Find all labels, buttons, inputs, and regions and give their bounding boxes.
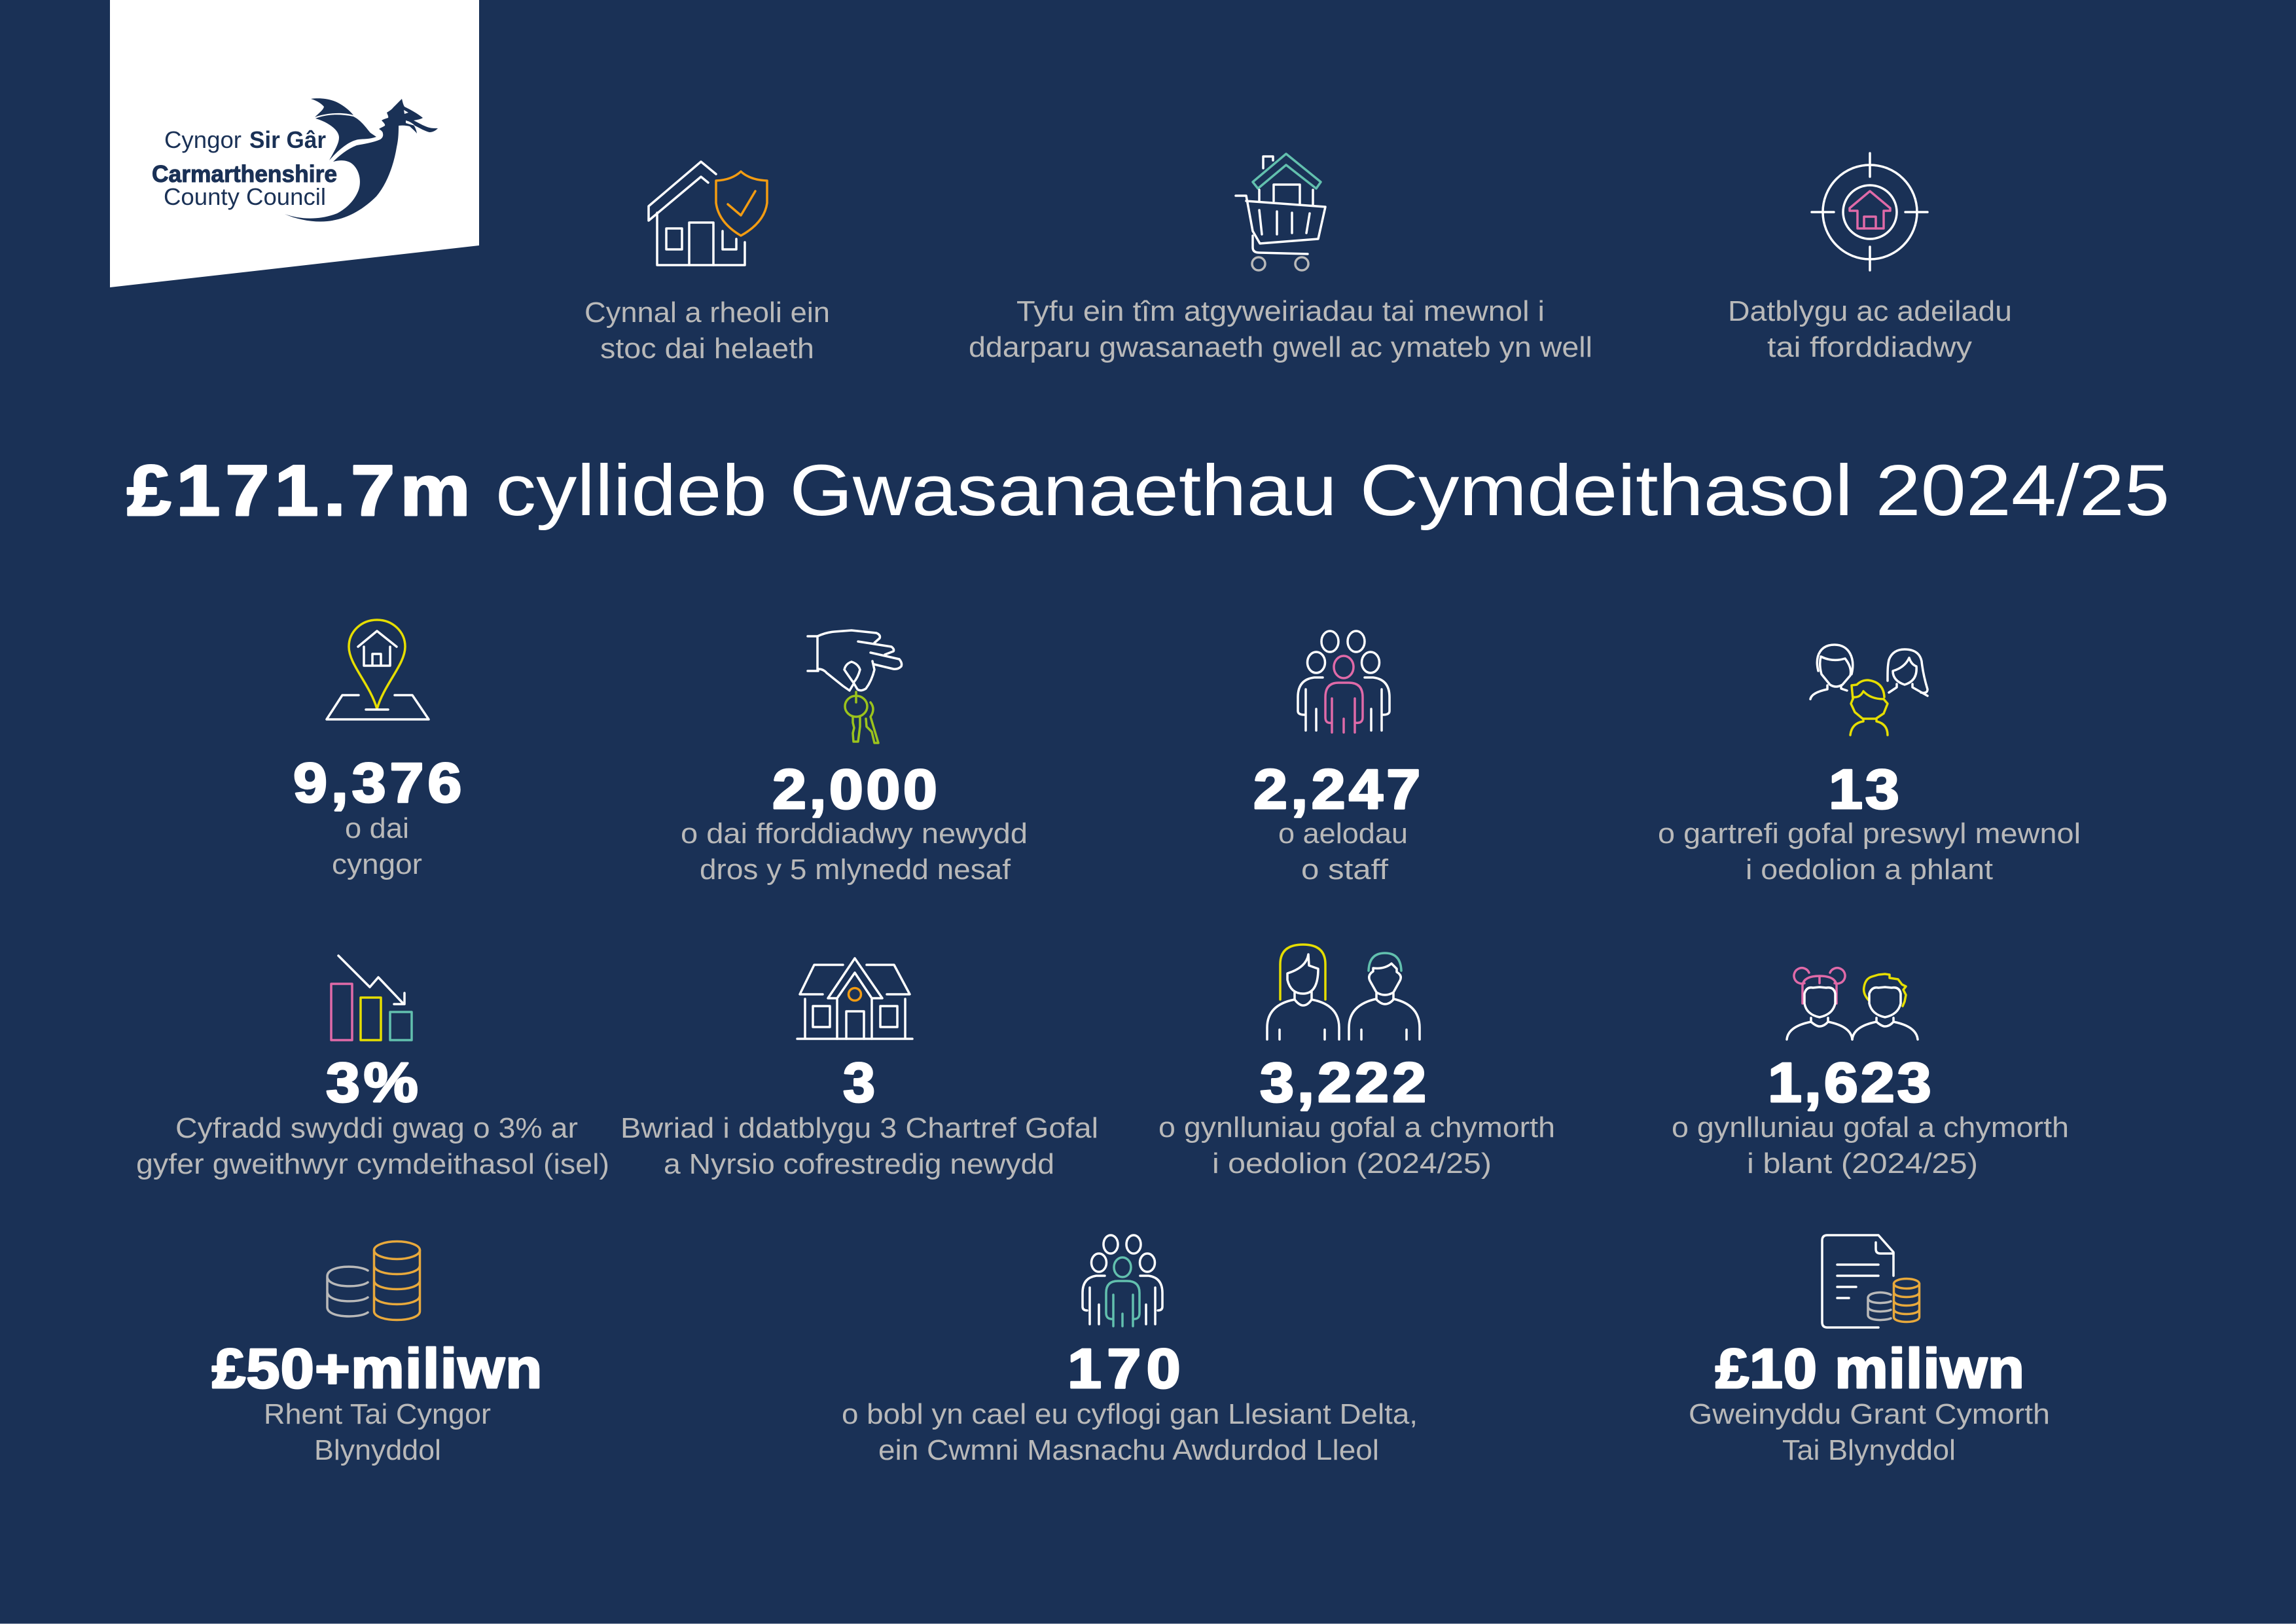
text: staff: [1278, 818, 1408, 886]
panel: vacancy rate: [136, 956, 609, 1180]
text: repairs team: Tyfu ein tîm atgyweiriadau tai mewnol i: [1016, 295, 1545, 327]
icon: two adults: [1267, 945, 1420, 1039]
logo wordmark: [152, 126, 337, 210]
panel: manage housing stock: [584, 162, 830, 365]
title: £171.7m: [127, 450, 471, 531]
text: council houses: cyngor: [332, 848, 422, 880]
text: Llesiant Delta employees: ein Cwmni Masnachu Awdurdod Lleol: [878, 1434, 1379, 1466]
text: council houses: o dai: [345, 812, 409, 844]
text: vacancy rate: [136, 1112, 609, 1180]
title: cyllideb Gwasanaethau Cymdeithasol 2024/25: [495, 450, 2170, 531]
text: residential care homes: o gartrefi gofal preswyl mewnol: [1658, 818, 2081, 850]
text: staff: o staff: [1301, 854, 1389, 886]
icon: two children: [1787, 968, 1918, 1039]
text: council housing rent: Rhent Tai Cyngor: [264, 1398, 491, 1430]
logo wordmark: Sir Gâr: [249, 126, 326, 153]
logo wordmark: Cyngor: [164, 126, 242, 153]
icon: coin stacks: [327, 1241, 420, 1320]
text: affordable homes: o dai fforddiadwy newydd: [681, 818, 1028, 850]
panel: affordable homes: [681, 630, 1028, 886]
panel: council housing rent: [212, 1241, 542, 1466]
text: adult care plans: i oedolion (2024/25): [1212, 1147, 1492, 1180]
stat: 2,247: 2,247: [1253, 758, 1420, 820]
text: housing support grant: Gweinyddu Grant Cymorth: [1689, 1398, 2050, 1430]
text: affordable housing: Datblygu ac adeiladu: [1728, 295, 2012, 327]
panel: affordable housing: [1728, 153, 2012, 363]
text: children's care plans: o gynlluniau gofal a chymorth: [1672, 1111, 2069, 1144]
text: adult care plans: [1158, 1111, 1555, 1180]
text: council housing rent: Blynyddol: [314, 1434, 441, 1466]
text: affordable homes: [681, 818, 1028, 886]
icon: house in shopping trolley: [1236, 154, 1325, 270]
stat: 3,222: 3,222: [1260, 1051, 1426, 1113]
icon: hand with keys: [808, 630, 902, 743]
text: council houses: [332, 812, 422, 880]
text: staff: o aelodau: [1278, 818, 1408, 850]
text: residential care homes: i oedolion a phlant: [1746, 854, 1993, 886]
stat: 3%: 3%: [326, 1051, 418, 1113]
text: nursing homes: Bwriad i ddatblygu 3 Chartref Gofal: [620, 1112, 1098, 1144]
stat: 2,000: 2,000: [772, 758, 937, 820]
text: affordable homes: dros y 5 mlynedd nesaf: [700, 854, 1011, 886]
icon: falling bar chart: [331, 956, 412, 1040]
stat: 13: 13: [1829, 758, 1899, 820]
panel: council logo: [110, 0, 479, 287]
text: housing support grant: [1689, 1398, 2050, 1466]
panel: repairs team: [969, 154, 1592, 363]
panel: residential care homes: [1658, 645, 2081, 886]
stat: 170: 170: [1067, 1337, 1181, 1399]
icon: family: [1810, 645, 1928, 735]
text: children's care plans: i blant (2024/25): [1747, 1147, 1978, 1180]
text: residential care homes: [1658, 818, 2081, 886]
icon: map pin with house: [327, 620, 429, 719]
panel: adult care plans: [1158, 945, 1555, 1180]
icon: group of people, pink centre: [1298, 631, 1390, 732]
text: manage housing stock: Cynnal a rheoli ein: [584, 297, 830, 329]
text: affordable housing: tai fforddiadwy: [1767, 331, 1972, 363]
icon: dragon: [285, 98, 438, 222]
stat: £10 miliwn: £10 miliwn: [1715, 1337, 2024, 1399]
icon: document with coins: [1822, 1235, 1919, 1327]
icon: target with house: [1812, 153, 1928, 270]
panel: staff: [1253, 631, 1420, 886]
text: children's care plans: [1672, 1111, 2069, 1180]
panel: housing support grant: [1689, 1235, 2050, 1466]
text: vacancy rate: gyfer gweithwyr cymdeithasol (isel): [136, 1148, 609, 1180]
icon: house with shield: [649, 162, 767, 265]
text: repairs team: ddarparu gwasanaeth gwell ac ymateb yn well: [969, 331, 1592, 363]
stat: 9,376: 9,376: [293, 751, 461, 814]
icon: group of people, teal centre: [1083, 1235, 1162, 1326]
panel: nursing homes: [620, 958, 1098, 1180]
panel: Llesiant Delta employees: [842, 1235, 1418, 1466]
text: Llesiant Delta employees: [842, 1398, 1418, 1466]
icon: large house: [797, 958, 912, 1039]
text: nursing homes: [620, 1112, 1098, 1180]
text: housing support grant: Tai Blynyddol: [1782, 1434, 1956, 1466]
text: council housing rent: [264, 1398, 491, 1466]
text: vacancy rate: Cyfradd swyddi gwag o 3% ar: [175, 1112, 578, 1144]
logo wordmark: Carmarthenshire: [152, 160, 337, 187]
text: manage housing stock: stoc dai helaeth: [600, 333, 814, 365]
logo wordmark: County Council: [164, 183, 326, 210]
stat: 3: 3: [843, 1052, 875, 1114]
panel: council houses: [293, 620, 461, 880]
text: manage housing stock: [584, 297, 830, 365]
stat: 1,623: 1,623: [1768, 1051, 1931, 1113]
text: adult care plans: o gynlluniau gofal a chymorth: [1158, 1111, 1555, 1144]
text: affordable housing: [1728, 295, 2012, 363]
text: Llesiant Delta employees: o bobl yn cael eu cyflogi gan Llesiant Delta,: [842, 1398, 1418, 1430]
text: nursing homes: a Nyrsio cofrestredig newydd: [664, 1148, 1054, 1180]
panel: children's care plans: [1672, 968, 2069, 1180]
stat: £50+miliwn: £50+miliwn: [212, 1337, 542, 1399]
text: repairs team: [969, 295, 1592, 363]
